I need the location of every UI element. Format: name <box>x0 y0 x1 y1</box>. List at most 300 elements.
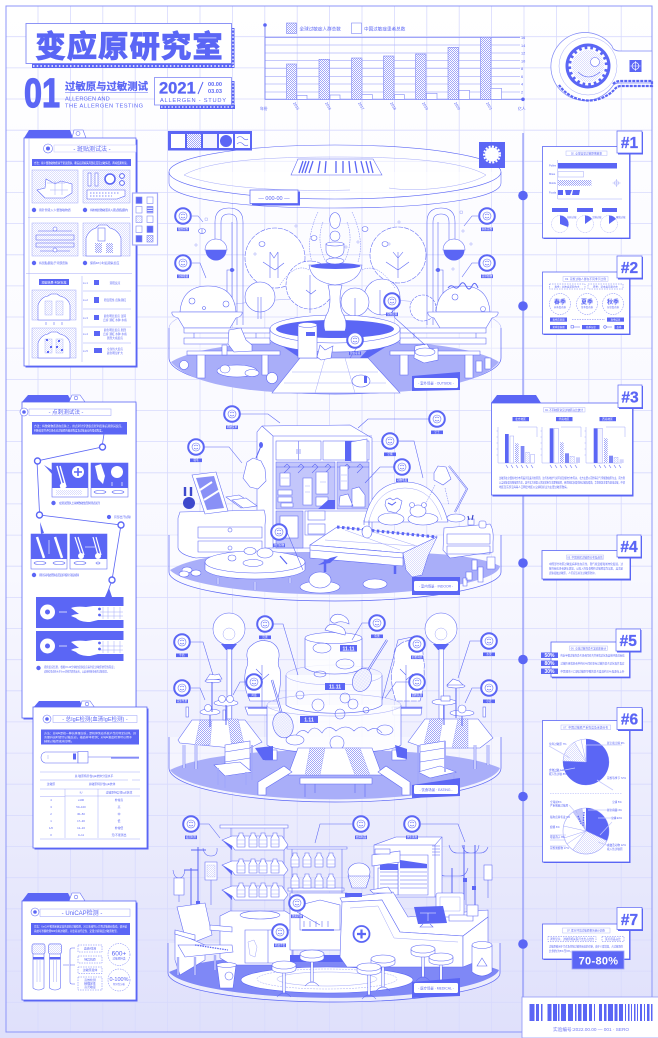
stat circles: 0-100% <box>110 977 129 983</box>
hanging bag <box>243 442 266 489</box>
book <box>226 495 257 508</box>
scene tag: - 室外场景 · OUTSIDE - <box>418 380 454 386</box>
step captions row 2: 将斑贴器贴于背部皮肤 <box>39 260 68 265</box>
badge #4: #4 <box>620 539 638 556</box>
connector line and nodes: 局部出汗拭除 <box>114 515 131 519</box>
upper pie chart: 食物过敏 12% <box>549 768 566 772</box>
bar chart: allergy population: 2019 <box>421 102 429 111</box>
description bar <box>31 923 130 935</box>
description bar: 判断结果并评估患者对过敏原的敏感程度及过敏反应的强弱程度。 <box>34 428 104 432</box>
scene tag: - 医疗场景 · MEDICAL - <box>418 986 454 990</box>
scattered items <box>180 322 491 387</box>
season flow rows: 冬季 <box>617 325 622 329</box>
grading table: Lv.5 <box>83 349 88 353</box>
lower pie chart: 霉菌孢子 8% <box>550 835 566 839</box>
lower pie chart: 尘螨 5% <box>612 800 622 804</box>
IgE reference table: 高 <box>118 805 121 809</box>
arm reaction illustrations <box>36 597 124 661</box>
prick step 2 illustrations <box>31 534 107 569</box>
leader lines <box>200 824 465 932</box>
dashed notes: 医疗药品占比 <box>605 937 621 941</box>
side tables <box>178 719 493 769</box>
scene 4: medical <box>168 816 500 1002</box>
description bar: 方法：UniCAP检测系统是较先进的过敏检测，2022年被列入世界过敏组织指南，使用该 <box>34 924 127 928</box>
grading table: 颜色明显反应 浸润 <box>104 314 126 318</box>
tab icon <box>80 701 95 708</box>
bees and sparkles <box>195 211 472 270</box>
marker: serum: 血清制品 <box>356 835 367 839</box>
region labels: 华南地区 <box>559 417 570 421</box>
dashed notes <box>550 284 623 289</box>
marker: alcohol <box>289 895 305 918</box>
scene tag: - 饮食场景 · EATING - <box>419 787 453 792</box>
panel: UniCAP test <box>22 893 138 1002</box>
marker: insects: 昆虫毒液 <box>350 351 361 355</box>
marker: drug <box>404 816 420 839</box>
bar chart: allergy population: 亿人 <box>518 106 526 111</box>
marker: bedding: 棉被床单 <box>227 425 238 429</box>
IgE reference table: 4 <box>50 798 52 802</box>
season circles: 草本类花粉 <box>581 305 594 309</box>
dashed notes: 调查显示，过敏原相关医疗支出占比约 <box>550 937 594 941</box>
panel #3: bar charts by region <box>491 395 634 496</box>
round table <box>205 548 305 590</box>
IgE reference table: 2 <box>50 812 52 816</box>
title block: 变应原研究室 <box>36 22 222 66</box>
armchair <box>175 903 233 975</box>
fish tags: 11.11 <box>343 646 355 652</box>
season circles <box>550 294 624 314</box>
bracket and dashed labels: 血液/体液 <box>84 946 96 950</box>
lower pie chart: 严重致敏过敏原 <box>550 804 569 808</box>
date stamp: 03.03 <box>208 89 222 95</box>
marker: alcohol: 激素药物 <box>292 914 303 918</box>
stools <box>272 945 453 999</box>
fountain pool <box>270 315 400 352</box>
grading table: 丘疹 潮红 水肿 水疱 <box>103 318 127 322</box>
counter left case <box>290 893 347 962</box>
dashed notes <box>548 936 624 942</box>
IgE reference table: 0~11 <box>78 833 84 837</box>
pie row: 霉菌过敏 <box>616 215 626 219</box>
scene tag <box>412 577 460 595</box>
barcode bars <box>530 1004 652 1021</box>
gear icon tile <box>479 142 505 168</box>
trees <box>245 641 424 715</box>
prick step 3 caption <box>36 665 116 674</box>
horizontal bar chart: Foods <box>549 190 557 194</box>
description bar: 方法：总IgE是指一种抗体蛋白质，是机体免疫系统产生的特定抗体，其 <box>44 731 137 735</box>
stat circles <box>108 944 130 991</box>
headboard and bed <box>310 482 448 577</box>
stat rows: 80% <box>544 661 555 667</box>
upper pie chart: 常年过敏原 7% <box>549 742 567 746</box>
body text <box>549 562 623 575</box>
lid tag 000-00 <box>250 190 300 206</box>
trees <box>245 227 436 321</box>
section number 01 and subtitle <box>24 70 148 116</box>
barcode footer: 实验编号:2022.00.00 — 001 · SERO <box>553 1026 629 1033</box>
bar chart: allergy population: 16 <box>521 36 525 40</box>
step captions row 1: 将制成的致敏液滴入受试斑贴器内 <box>90 207 128 212</box>
bracket and dashed labels <box>63 945 102 990</box>
prick step 1 illustrations <box>52 463 128 497</box>
badge #7 <box>617 908 643 931</box>
marker: insects <box>347 332 363 355</box>
pots with bushes <box>172 283 498 328</box>
region labels: 西南地区 <box>602 417 613 421</box>
highlight 70-80% <box>572 951 624 969</box>
panel #2: seasons <box>542 272 630 335</box>
bar chart: allergy population: 2016 <box>324 102 332 111</box>
marker: pets <box>384 293 400 316</box>
stat rows: 中国城市人口因过敏原导致的鼻炎发病约30%及逐年上升 <box>560 670 625 674</box>
grading table: 颜色明显扩大 <box>107 351 123 355</box>
bar chart: allergy population: 2 <box>521 90 523 94</box>
marker: soy: 花生坚果 <box>177 699 188 703</box>
prick step 3 caption: 观察反应结果，根据15-20分钟的皮肤反应来判定过敏原的阳性程度； <box>44 665 116 669</box>
panel #5: percentages <box>541 642 630 678</box>
IV stands left <box>173 847 217 905</box>
platform <box>169 737 501 802</box>
body text: 过敏原在全国各地分布有差异及差异的原因，这与各地的气候环境及植物分布有关，北方主要以花粉等空气传播致敏原为主，南方则 <box>499 476 625 480</box>
marker: corn: 小麦 <box>486 699 492 703</box>
description bar: 方法：将致敏物质滴在皮肤上，用点刺针穿透表皮轻刺皮肤后观察其反应， <box>34 424 124 428</box>
lower pie chart: 食物及动物 12% <box>607 843 627 847</box>
floor items <box>179 556 495 593</box>
marker: pillow: 羽毛 <box>193 458 199 462</box>
panel #7: proportion <box>542 924 630 960</box>
caption: 05. 中国地区过敏原分布及趋势 <box>567 555 603 559</box>
description bar <box>41 730 139 744</box>
region labels <box>512 417 616 421</box>
body text: 敏性疾病患者逐年增加，以吸入性及食物性过敏原最为常见，其次是 <box>549 566 623 570</box>
step illustrations row 2 <box>32 223 130 256</box>
upper pie chart <box>549 739 627 790</box>
center table and benches <box>255 745 410 797</box>
IgE reference table: 无/不能测出 <box>112 833 127 837</box>
scene tag <box>412 978 460 998</box>
badge #1: #1 <box>621 135 638 152</box>
fountain body <box>280 212 395 331</box>
marker: fruit <box>481 633 497 656</box>
lamps right <box>427 208 465 325</box>
season flow rows: 秋季结束 <box>611 318 621 322</box>
IgE reference table: 总敏原特异性IgE抗体 <box>89 782 115 786</box>
marker: dust <box>429 411 445 434</box>
badge #6 <box>617 708 643 731</box>
bar chart: allergy population: 2018 <box>389 102 397 111</box>
marker: nuts <box>246 674 262 697</box>
badge #7: #7 <box>621 912 638 929</box>
dashed notes: 春季：树木类花粉为主 <box>554 284 580 288</box>
marker: mite <box>382 433 398 456</box>
bar chart: allergy population: 2020 <box>453 102 461 111</box>
IgE reference table: 50~100 <box>76 805 86 809</box>
stat circles: 600+ <box>112 950 127 958</box>
dresser left <box>178 510 265 558</box>
bar chart: allergy population: 2017 <box>357 102 365 111</box>
body text: 中国部分地区过敏发病率处在高位，随气候变暖和城市化发展，过 <box>549 562 623 566</box>
heading: patch test: - 斑贴测试法 - <box>73 145 111 153</box>
description bar: 辅助过敏性疾病诊断。 <box>44 739 74 743</box>
lower pie chart: 猫狗皮屑毛发 6% <box>550 815 571 819</box>
badge #4 <box>617 535 642 558</box>
grading table: 全身性大反应 <box>107 347 123 351</box>
marker: fabric <box>271 524 287 547</box>
IgE reference table: 非常高 <box>115 798 123 802</box>
heading: prick test <box>20 408 111 416</box>
bar chart: allergy population: 10 <box>521 60 525 64</box>
marker: serum <box>353 816 369 839</box>
leader lines <box>204 414 429 570</box>
badge #2 <box>617 256 643 280</box>
badge #3: #3 <box>621 390 639 406</box>
prick step 3 caption: 皮肤红晕直径大于3mm的视为阳性反应，以此来判断患者的过敏情况。 <box>44 670 109 674</box>
bracket and dashed labels: 精确定性 <box>84 980 96 986</box>
marker: pets: 宠物皮屑 <box>387 312 398 316</box>
body text <box>549 944 623 953</box>
lower pie chart: 屋尘真菌 4% <box>607 808 623 812</box>
body text: 地区及东部沿海等人口稠密地区以尘螨和屋尘为主要过敏原致病。 <box>499 485 569 489</box>
marker: fish: 鱼类 <box>374 634 380 638</box>
recycle bin <box>472 942 492 976</box>
bracket and dashed labels: 高灵敏度 <box>84 984 96 989</box>
grading table: Lv.2 <box>83 298 88 302</box>
highlight 70-80%: 70-80% <box>579 956 618 968</box>
panel: prick test <box>20 395 136 720</box>
chart legend: 中国过敏症患者总数 <box>364 26 406 32</box>
test tubes <box>32 944 62 990</box>
bar chart: allergy population: 4 <box>521 82 523 86</box>
grading table: Lv.4 <box>83 332 88 336</box>
bar chart: allergy population: 6 <box>521 75 523 79</box>
step illustrations row 1 <box>32 170 130 203</box>
grading table: 颜色明显反应 剧烈 <box>104 328 126 332</box>
IgE reference table: 低 <box>118 819 121 823</box>
mirror <box>192 472 228 514</box>
lower pie chart <box>550 800 627 854</box>
ice cream bowl <box>348 863 370 888</box>
marker: fruit: 水果 <box>486 652 492 656</box>
connector line and nodes <box>34 434 131 597</box>
waste bin <box>216 962 236 988</box>
marker: fish <box>369 615 385 638</box>
scene 3: dining <box>169 613 501 802</box>
caption: 04. 不同地区常见过敏原占比统计 <box>545 408 583 412</box>
IgE reference table: 过敏原特异性IgE抗体 <box>106 790 132 794</box>
bottle rack <box>287 847 347 893</box>
marker: grass <box>175 255 191 278</box>
marker: latex <box>272 924 288 947</box>
stat rows: 50% <box>544 653 555 659</box>
stat rows: 约近半数过敏性鼻炎患者同时合并哮喘症状及其他呼吸道疾病 <box>560 654 625 658</box>
grading table: 轻度阳性 皮肤潮红 <box>104 298 126 302</box>
aquarium tiers <box>267 614 401 753</box>
panel #6: pie charts <box>542 720 630 863</box>
IgE reference table: 3 <box>50 805 52 809</box>
marker: tree pollen: 树木花粉 <box>482 227 493 231</box>
stat rows: 30% <box>544 669 555 675</box>
icon: cross emblem <box>354 926 370 942</box>
leader lines <box>190 623 481 703</box>
barcode footer <box>522 997 658 1038</box>
horizontal bar chart: Mites <box>549 172 556 176</box>
step captions row 1 <box>32 207 128 212</box>
date stamp: 00.00 <box>208 82 222 88</box>
bar chart: allergy population <box>260 23 526 111</box>
material swatch strip <box>168 131 252 150</box>
region labels: 北方地区 <box>515 417 526 421</box>
bracket and dashed labels: 特异抗原 <box>84 956 96 962</box>
marker: mould: 花草植物 <box>482 274 493 278</box>
panel: patch test <box>24 130 138 368</box>
caption: 06. 全球过敏性鼻炎发病率统计 <box>571 646 607 650</box>
benches <box>184 328 486 378</box>
marker: mite: 尘螨 <box>387 452 393 456</box>
description bar <box>32 422 127 434</box>
season flow rows <box>550 318 624 329</box>
date stamp: 2021 <box>159 80 196 98</box>
marker: wheat: 贝类 <box>262 635 268 639</box>
scene 2: bedroom <box>169 406 501 601</box>
IgE reference table: 非常低 <box>115 826 123 830</box>
season circles: 春季 <box>554 298 566 306</box>
chart legend <box>286 23 406 34</box>
grading table: Lv.3 <box>83 316 88 320</box>
bracket and dashed labels: 高效检测 <box>84 977 96 982</box>
IgE reference table: 1/0 <box>49 826 53 830</box>
wardrobe <box>257 425 372 548</box>
fish tags <box>300 645 357 724</box>
marker: mould <box>479 255 495 278</box>
marker: wheat <box>257 616 273 639</box>
date stamp: ALLERGEN - STUDY <box>160 98 226 104</box>
season flow rows: 秋季杂草 <box>586 325 596 329</box>
marker: pollen: 蜜蜂花粉 <box>178 227 189 231</box>
marker: cake <box>409 674 425 697</box>
marker: vaccine <box>183 816 199 839</box>
icon: syringe <box>41 752 139 763</box>
pie row <box>552 208 626 232</box>
scene 1: garden <box>169 208 501 394</box>
barcode decal <box>291 159 382 175</box>
step captions row 2: 保持48小时后观察反应 <box>90 260 119 265</box>
IgE reference table: 总 敏原特异性IgE抗体分泌水平 <box>75 774 113 778</box>
season circles: 夏季 <box>581 298 593 306</box>
badge #5: #5 <box>620 633 637 650</box>
caption: 07. 医疗环境过敏原相关统计调查 <box>567 929 605 933</box>
season circles: 杂草类花粉 <box>607 305 620 309</box>
platform <box>169 298 501 394</box>
marker: grass: 尘螨霉菌 <box>178 274 189 278</box>
scene tag: - 室内场景 · INDOOR - <box>419 584 453 588</box>
grading table: 丘疹 潮红 水肿 水疱 <box>103 332 127 336</box>
bar chart: allergy population: 2015 <box>292 102 300 111</box>
monitor <box>414 893 478 927</box>
marker: egg <box>174 634 190 657</box>
upper pie chart: 吸入性过敏 8% <box>549 772 567 776</box>
IgE reference table: 30~50 <box>77 812 85 816</box>
scene 1 lid: floating disc <box>169 145 501 208</box>
marker: pollen <box>175 208 191 231</box>
stat circles: 过敏原种类 <box>113 956 126 960</box>
tall shelf <box>220 825 288 913</box>
bar chart: allergy population: 14 <box>521 44 525 48</box>
caption <box>544 408 585 412</box>
nightstand right <box>443 515 493 558</box>
description bar: 系统可准确检测600余种过敏原，对患者进行定性、定量分析确定过敏原类型。 <box>34 929 119 933</box>
badge #5 <box>616 629 642 652</box>
step captions row 2 <box>32 260 119 265</box>
IgE reference table: 0 <box>50 833 52 837</box>
scene tag <box>412 372 460 391</box>
marker: corn <box>481 680 497 703</box>
back illustrations <box>32 290 76 358</box>
prick step 2 caption: 用针头刺破皮肤表层后停留片刻后拭除 <box>39 573 79 577</box>
season flow rows: 夏季草粉期 <box>553 325 565 329</box>
badge #1 <box>617 131 643 154</box>
platform <box>169 535 501 601</box>
bracket and dashed labels: 过敏原载体 <box>83 967 97 972</box>
heading: prick test: - 点刺测试法 - <box>49 408 84 416</box>
marker: nuts: 鸡蛋 <box>251 693 257 697</box>
marker: cake: 面粉麸质 <box>412 693 423 697</box>
pie row: 尘螨过敏 <box>592 215 602 219</box>
timeline with nodes <box>518 133 528 1032</box>
section number 01 and subtitle: 过敏原与过敏测试 <box>65 78 148 93</box>
IgE reference table: 17~30 <box>77 819 85 823</box>
marker: fabric: 化纤织物 <box>274 543 285 547</box>
panel #4: note <box>542 550 631 580</box>
description bar <box>32 159 131 166</box>
leader lines <box>192 216 478 358</box>
result label <box>39 279 69 285</box>
caption: 07. 中国过敏原严重程度及来源分布 <box>563 726 609 730</box>
horizontal bar chart <box>549 160 622 199</box>
caption <box>561 725 610 730</box>
lid tag 000-00: — 000-00 — <box>258 196 290 202</box>
IgE reference table: 1 <box>50 819 52 823</box>
stat rows <box>541 652 625 675</box>
logo: gear emblem with tab <box>551 32 652 100</box>
chart legend: 全球过敏症人群总数 <box>300 26 341 32</box>
heading: patch test <box>44 144 136 153</box>
fish tags: 11.11 <box>329 684 341 690</box>
section number 01 and subtitle: ALLERGEN AND <box>65 96 110 102</box>
grouped bars <box>496 427 625 468</box>
IV stands right <box>437 845 492 905</box>
marker: latex: 乳胶手套 <box>275 943 286 947</box>
tab icon <box>69 893 85 901</box>
body text: 过敏原被用于门诊及住院过敏性疾病的诊断，由于人群增加，占过敏原的 <box>549 944 623 948</box>
marker: egg: 牛奶 <box>179 653 185 657</box>
file cabinet <box>372 837 442 897</box>
season flow rows: 春季花粉期 <box>553 318 565 322</box>
body text <box>499 476 625 489</box>
IgE reference table: 过敏原 <box>47 782 55 786</box>
bar chart: allergy population: 年份 <box>260 106 268 111</box>
badge #6: #6 <box>621 712 638 728</box>
heading: IgE test: - 总IgE检测(血清IgE检测) - <box>62 715 128 723</box>
description bar: 方法：将少量致敏物质涂于受试皮肤，覆盖后观察其局部反应及过敏情况，再将结果判读。 <box>34 160 129 165</box>
pie row: 花粉过敏 <box>567 215 577 219</box>
badge #3 <box>618 385 643 409</box>
horizontal bar chart: Molds <box>549 181 557 185</box>
fish tags: 1.11 <box>304 718 314 724</box>
panel #1: allergen ratios <box>542 146 630 239</box>
marker: bedding <box>224 406 240 429</box>
